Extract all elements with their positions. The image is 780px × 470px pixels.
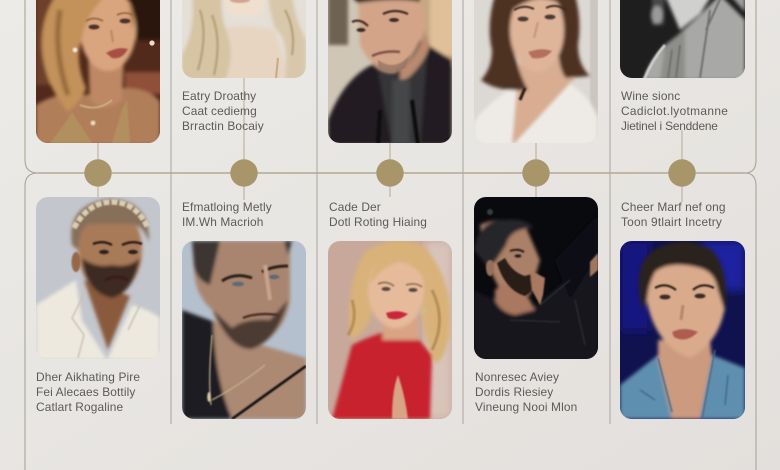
caption: column 4 bottom: Dordis Riesiey xyxy=(475,385,553,399)
portrait: man in black with hand at neck xyxy=(474,197,598,360)
portrait: man in black suit xyxy=(328,0,454,145)
caption: column 2 top: Brractin Bocaiy xyxy=(182,119,264,133)
caption: column 5 top: Cadiclot.lyotmanne xyxy=(621,104,728,118)
caption: column 1 bottom xyxy=(36,370,140,414)
portrait: short-haired woman in denim jacket xyxy=(620,241,745,419)
portrait: black-and-white man in blazer xyxy=(620,0,745,80)
caption: column 5 top xyxy=(621,89,728,133)
timeline nodes xyxy=(84,159,696,187)
portrait: long-haired blonde woman xyxy=(182,0,306,80)
caption: column 3 bottom: Cade Der xyxy=(329,200,381,214)
caption: column 5 bottom: Toon 9tlairt Incetry xyxy=(621,215,722,229)
caption: column 2 top: Eatry Droathy xyxy=(182,89,256,103)
portrait: man with bleached curly hair xyxy=(36,197,160,360)
caption: column 3 bottom xyxy=(329,200,427,229)
caption: column 3 bottom: Dotl Roting Hiaing xyxy=(329,215,427,229)
portrait: blonde woman in red dress xyxy=(328,241,452,419)
caption: column 1 bottom: Dher Aikhating Pire xyxy=(36,370,140,384)
caption: column 5 bottom xyxy=(621,200,726,229)
portrait: brunette woman in white blouse xyxy=(474,0,598,145)
caption: column 2 bottom xyxy=(182,200,272,229)
caption: column 1 bottom: Fei Alecaes Bottily xyxy=(36,385,135,399)
caption: column 1 bottom: Catlart Rogaline xyxy=(36,400,123,414)
portrait: bearded man with necklace xyxy=(182,241,306,419)
caption: column 2 top xyxy=(182,89,264,133)
caption: column 4 bottom: Vineung Nooi Mlon xyxy=(475,400,577,414)
caption: column 5 bottom: Cheer Marf nef ong xyxy=(621,200,726,214)
caption: column 4 bottom xyxy=(475,370,577,414)
caption: column 2 top: Caat cediemg xyxy=(182,104,257,118)
caption: column 2 bottom: Efmatloing Metly xyxy=(182,200,272,214)
caption: column 4 bottom: Nonresec Aviey xyxy=(475,370,559,384)
caption: column 5 top: Jietinel i Senddene xyxy=(621,119,718,133)
caption: column 5 top: Wine sionc xyxy=(621,89,680,103)
portrait: blonde woman in gold necklace xyxy=(36,0,165,145)
caption: column 2 bottom: IM.Wh Macrioh xyxy=(182,215,264,229)
